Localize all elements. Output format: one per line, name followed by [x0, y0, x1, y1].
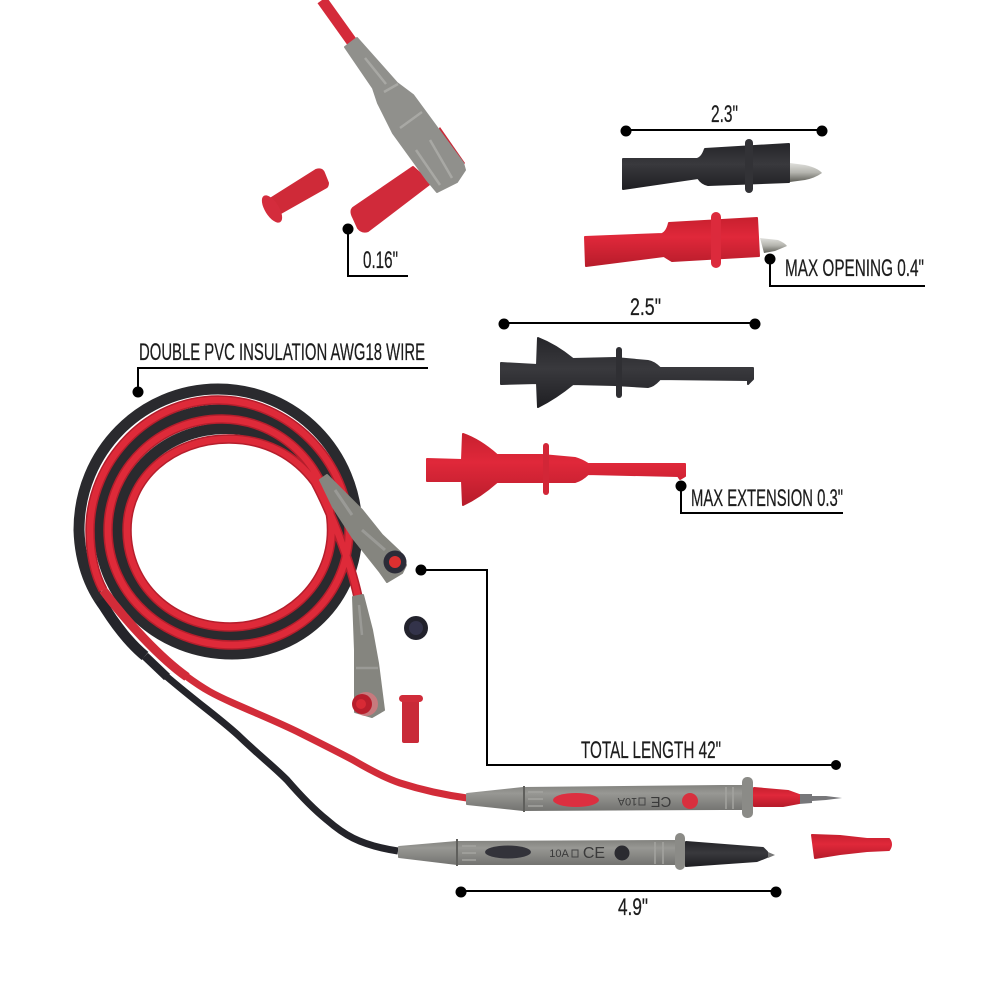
black hook clip	[501, 338, 753, 407]
wire callout	[132, 339, 428, 398]
red test probe: 10A	[617, 795, 637, 807]
lower angled connector	[352, 595, 384, 717]
dimension: 0.16 inch	[342, 224, 408, 276]
black lead wire tail	[100, 600, 398, 851]
coiled wire spiral	[79, 389, 358, 654]
black banana clip	[623, 139, 822, 193]
red probe tip cover	[812, 835, 891, 858]
black socket cap	[404, 616, 428, 640]
red socket cap	[399, 695, 423, 743]
black test probe: 10A	[549, 848, 569, 860]
red lead wire tail	[103, 590, 467, 798]
red test probe	[467, 777, 842, 818]
red test probe: CE	[651, 793, 671, 810]
dimension: max extension	[676, 480, 843, 513]
dimension: 0.16 inch: 0.16"	[363, 247, 398, 274]
wire callout: DOUBLE PVC INSULATION AWG18 WIRE	[139, 339, 425, 366]
dimension: 4.9 inch	[456, 886, 782, 921]
upper angled connector	[320, 475, 406, 582]
dimension: 2.3 inch: 2.3"	[711, 101, 738, 128]
red banana clip	[585, 212, 787, 268]
right-angle connector with shroud	[322, 0, 465, 232]
red hook clip	[427, 434, 685, 505]
total length callout: TOTAL LENGTH 42"	[581, 737, 721, 764]
dimension: max opening	[764, 254, 925, 286]
dimension: 4.9 inch: 4.9"	[618, 894, 648, 921]
red shroud cap	[258, 169, 328, 226]
black test probe: CE	[583, 845, 605, 862]
dimension: 2.5 inch: 2.5"	[630, 294, 661, 321]
black test probe	[399, 833, 775, 870]
dimension: 2.5 inch	[498, 294, 760, 330]
dimension: max opening: MAX OPENING 0.4"	[785, 255, 924, 282]
dimension: 2.3 inch	[620, 101, 828, 136]
dimension: max extension: MAX EXTENSION 0.3"	[691, 485, 843, 512]
total length callout	[416, 564, 841, 770]
